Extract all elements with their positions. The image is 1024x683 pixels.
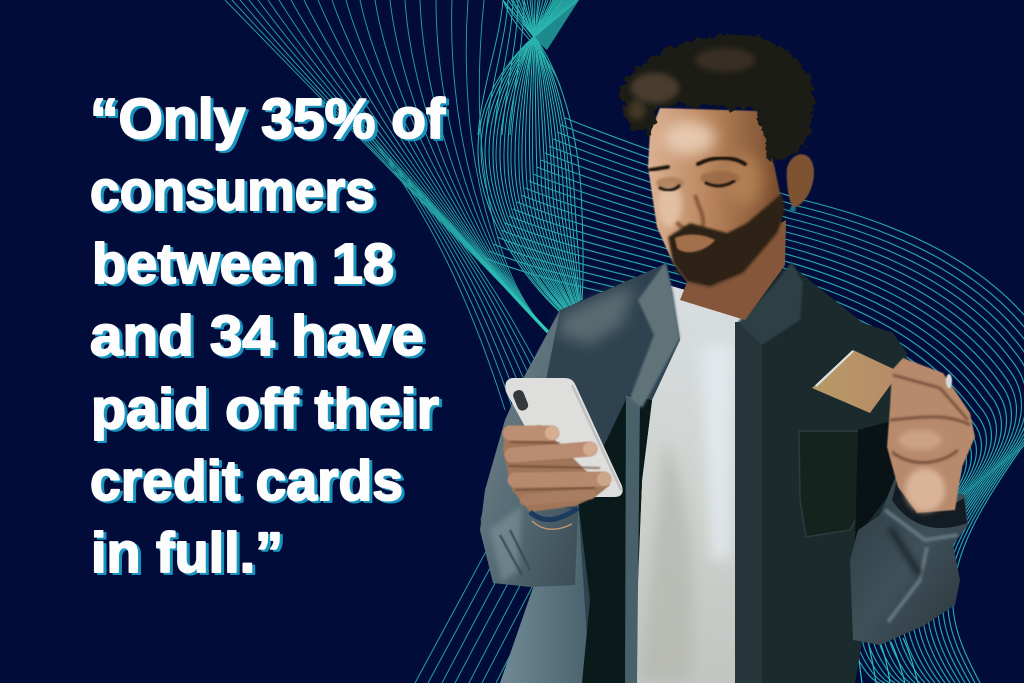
wave lines: right flowing set (485, 118, 1024, 683)
white t-shirt (633, 285, 745, 683)
wave lines: below ribbon (372, 140, 534, 410)
wave line pattern (225, 0, 1024, 683)
fingers (510, 433, 604, 500)
right hand (887, 358, 975, 513)
hair mass (622, 34, 815, 163)
jacket: left placket (625, 395, 640, 683)
left hand (503, 425, 611, 512)
sleeve cuff creases (490, 505, 522, 582)
quote text: “Only 35% of (90, 87, 446, 151)
beard (668, 193, 785, 287)
nose shadow (677, 195, 703, 230)
hair (622, 34, 815, 163)
eye sockets (656, 177, 684, 189)
sleeve fold highlight (885, 510, 958, 622)
jacket pocket (799, 431, 866, 537)
jacket: right collar (738, 262, 803, 345)
jacket: right placket (735, 322, 762, 683)
quote text (90, 87, 446, 585)
eyebrows (650, 158, 745, 170)
wave lines: lens doubling (481, 0, 580, 312)
jacket: right sleeve (850, 478, 968, 645)
person holding phone and credit card (480, 34, 975, 683)
fingertips (545, 426, 559, 440)
phone camera (512, 388, 530, 412)
palm (503, 425, 610, 512)
jacket: left front (480, 263, 680, 683)
wave lines: central lens (478, 0, 583, 312)
wave lines: bright diagonal ribbon (364, 128, 549, 334)
sleeve cuff (892, 480, 967, 528)
quote text: consumers (90, 159, 375, 223)
wave lines: top fan (225, 0, 548, 332)
lips (675, 235, 715, 252)
credit card (812, 350, 900, 413)
head (648, 108, 814, 287)
jacket: left lower panel (500, 500, 590, 683)
face (648, 108, 783, 287)
jacket: dark inner lining (578, 395, 652, 683)
phone (505, 378, 623, 497)
jacket: left collar (630, 263, 680, 408)
wave lines: lens upper left strands (478, 0, 560, 135)
jacket: dark shadow beside sleeve (855, 422, 896, 540)
quote text: paid off their (91, 377, 439, 441)
jacket: right front (672, 270, 907, 683)
ring (946, 374, 952, 388)
jacket: left sleeve (480, 310, 578, 587)
wave lines: top teal ribbon (533, 0, 579, 50)
wave lines: bottom right crossing set (857, 638, 918, 683)
wave lines: lower left set (414, 552, 532, 683)
neck (680, 220, 786, 320)
quote text: in full.” (91, 521, 283, 585)
eyes (660, 181, 734, 190)
quote text: credit cards (90, 449, 403, 513)
bracelets (530, 508, 578, 520)
quote text: between 18 (92, 232, 394, 296)
ear (787, 154, 814, 208)
jacket: shoulder highlight (558, 285, 635, 345)
hair highlights (631, 73, 679, 103)
quote text: and 34 have (90, 304, 424, 368)
earring (790, 206, 796, 212)
